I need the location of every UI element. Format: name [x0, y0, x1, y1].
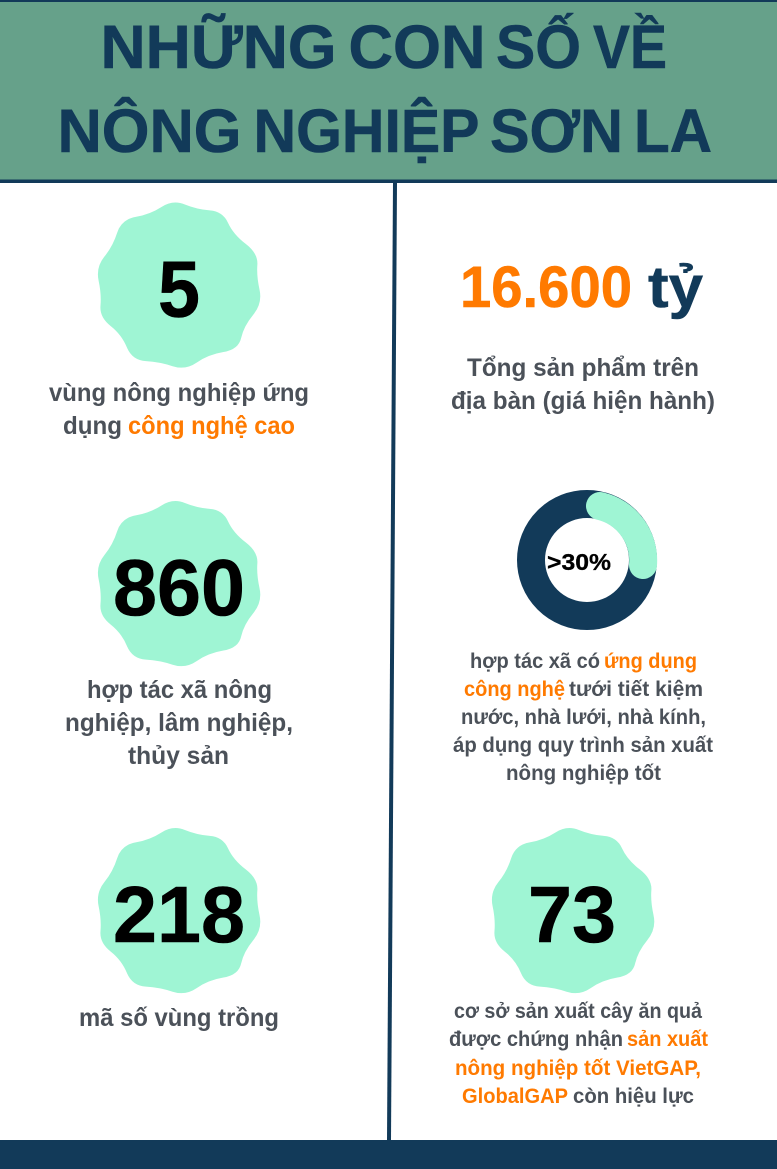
text: cooperatives: hợp tác xã nông — [87, 676, 272, 704]
stat: 5 zones — [49, 203, 309, 440]
text: high-tech zones — [49, 379, 309, 440]
title: NGHIỆP — [254, 97, 480, 165]
badge: 218: 218 — [113, 870, 245, 959]
stat: 860 cooperatives — [65, 501, 293, 770]
text: certified facilities: sản xuất — [627, 1028, 708, 1051]
text: technology cooperatives: hợp tác xã có — [470, 650, 600, 673]
title: VỀ — [593, 13, 667, 81]
text: technology cooperatives: công nghệ — [464, 678, 565, 701]
text: certified facilities: cơ sở sản xuất cây ăn quả — [454, 1000, 702, 1023]
donut chart — [531, 504, 643, 616]
text: growing area codes: mã số vùng trồng — [79, 1004, 279, 1032]
title: CON — [348, 13, 486, 81]
text: technology cooperatives: áp dụng quy trình sản xuất — [453, 734, 713, 757]
stat: 218 growing area codes — [79, 828, 279, 1032]
column divider — [387, 183, 397, 1140]
donut chart: >30% — [547, 549, 611, 575]
stat: 73 facilities — [449, 828, 708, 1108]
text: technology cooperatives: nông nghiệp tốt — [506, 762, 661, 785]
badge: 73: 73 — [528, 870, 616, 959]
footer bar — [0, 1140, 777, 1169]
title: SỐ — [496, 13, 581, 81]
text: technology cooperatives: tưới tiết kiệm — [569, 678, 703, 701]
title: NÔNG — [58, 97, 241, 165]
stat: over 30 percent — [453, 504, 713, 785]
text: total product — [451, 354, 715, 415]
text: certified facilities: được chứng nhận — [449, 1028, 623, 1051]
title: SƠN — [490, 97, 623, 165]
text: technology cooperatives — [453, 650, 713, 785]
badge: 218 — [98, 828, 260, 993]
header banner — [0, 0, 777, 183]
badge: 5 — [98, 203, 260, 368]
text: cooperatives: thủy sản — [128, 742, 229, 770]
text: technology cooperatives: ứng dụng — [604, 650, 697, 673]
text: certified facilities — [449, 1000, 708, 1108]
text: high-tech zones: vùng nông nghiệp ứng — [49, 379, 309, 407]
stat: 16.600 billion — [451, 255, 715, 415]
title: LA — [634, 97, 712, 165]
text: high-tech zones: dụng — [63, 412, 122, 440]
badge: 860 — [98, 501, 260, 666]
text: cooperatives: nghiệp, lâm nghiệp, — [65, 709, 293, 737]
text: technology cooperatives: nước, nhà lưới, nhà kính, — [461, 706, 706, 729]
text: certified facilities: còn hiệu lực — [573, 1085, 694, 1108]
text: certified facilities: nông nghiệp tốt VietGAP, — [455, 1057, 701, 1080]
text: certified facilities: GlobalGAP — [462, 1085, 568, 1108]
text: cooperatives — [65, 676, 293, 770]
text: total product: Tổng sản phẩm trên — [467, 354, 699, 382]
badge: 5: 5 — [158, 244, 200, 334]
title — [58, 13, 712, 165]
figure: 16.600 tỷ: tỷ — [648, 255, 703, 320]
badge: 860: 860 — [113, 543, 245, 632]
text: high-tech zones: công nghệ cao — [128, 412, 295, 440]
badge: 73 — [492, 828, 654, 993]
text: total product: địa bàn (giá hiện hành) — [451, 387, 715, 415]
figure: 16.600 tỷ: 16.600 — [460, 255, 632, 320]
title: NHỮNG — [100, 13, 336, 81]
